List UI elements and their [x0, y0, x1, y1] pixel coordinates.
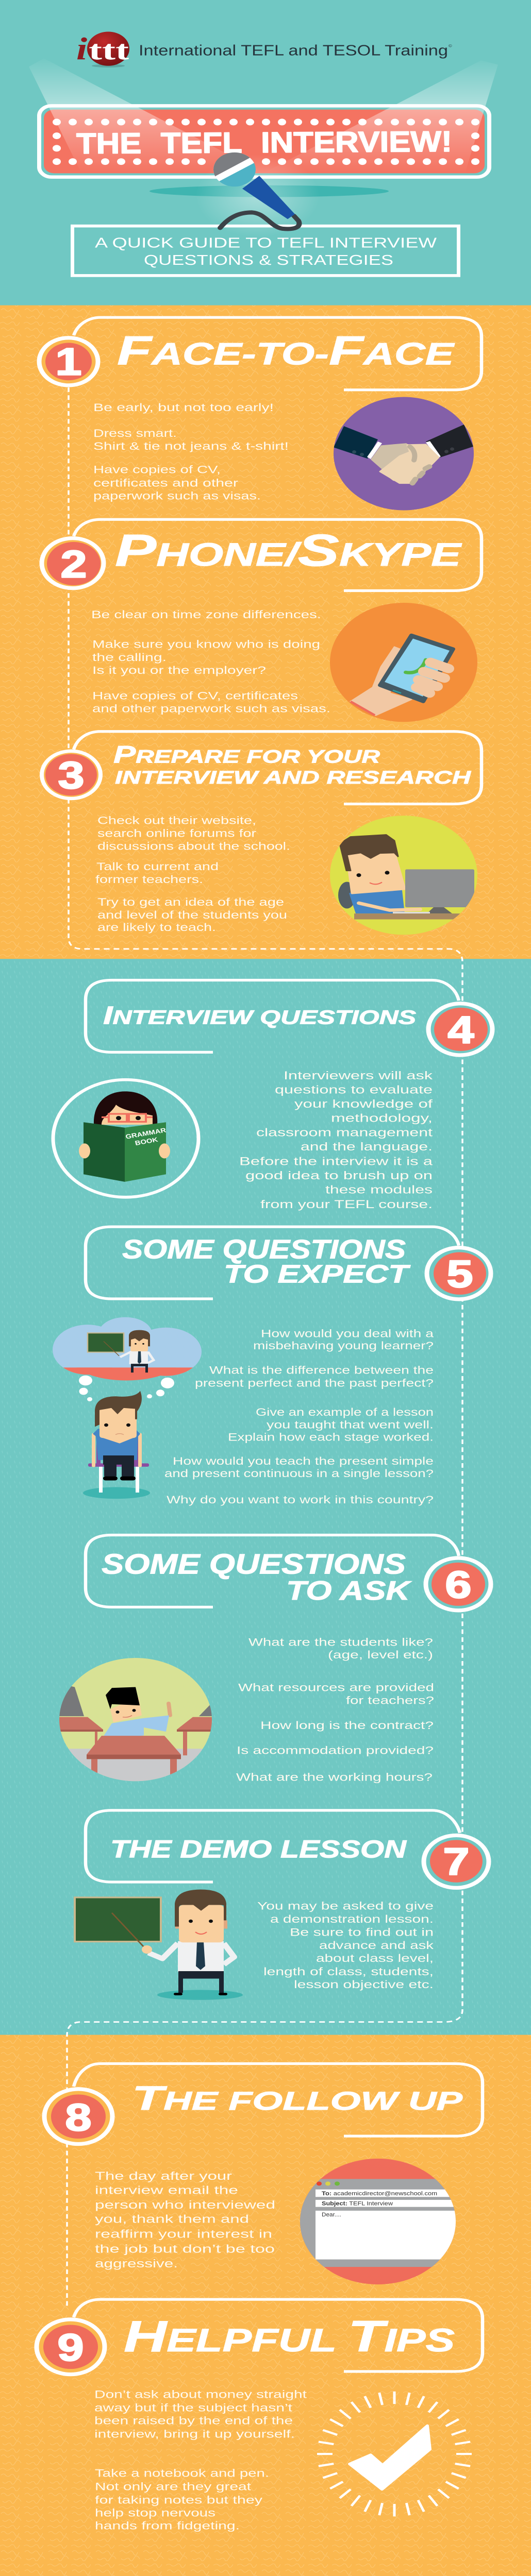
number badge 1 — [39, 338, 98, 385]
text block 3: and level of the students you — [97, 909, 287, 921]
text block 2: Have copies of CV, certificates — [92, 690, 298, 702]
text block 7: about class level, — [316, 1953, 434, 1965]
text block 3: search online forums for — [97, 828, 256, 840]
number badge 3: 3 — [58, 753, 85, 796]
logo — [76, 31, 452, 67]
text block 1: paperwork such as visas. — [93, 490, 261, 502]
text block 5: you taught that went well. — [267, 1419, 434, 1431]
heading: Some questions to ask: SOME QUESTIONS — [102, 1549, 406, 1580]
text block 5: Why do you want to work in this country? — [167, 1494, 434, 1506]
text block 3: Try to get an idea of the age — [97, 896, 284, 908]
text block 9: interview, bring it up yourself. — [94, 2429, 295, 2441]
panel: some questions to ask — [57, 1535, 491, 1786]
text block 9: Take a notebook and pen. — [95, 2468, 269, 2480]
text block 7: advance and ask — [319, 1940, 434, 1952]
text block 4: these modules — [325, 1183, 433, 1196]
text block 2: the calling. — [92, 652, 167, 664]
logo: i — [76, 31, 87, 66]
number badge 9 — [37, 2319, 105, 2375]
text block 4: your knowledge of — [294, 1097, 433, 1110]
panel: face-to-face — [39, 317, 482, 510]
text block 1 — [93, 402, 289, 502]
text block 6: (age, level etc.) — [328, 1649, 433, 1661]
number badge 2 — [42, 538, 104, 588]
heading: The follow up: THE FOLLOW UP — [132, 2079, 463, 2117]
heading: Some questions to ask — [102, 1549, 412, 1605]
icon: teacher at blackboard — [75, 1890, 243, 2000]
text block 3: discussions about the school. — [97, 841, 290, 853]
icon: thought bubbles — [79, 1376, 174, 1401]
text block 4: questions to evaluate — [275, 1083, 433, 1096]
text block 7: lesson objective etc. — [294, 1979, 434, 1991]
text block 8: you, thank them and — [95, 2213, 249, 2226]
heading: Prepare for your interview and research — [113, 741, 471, 788]
text block 4: methodology, — [331, 1112, 433, 1125]
icon: phone in hand — [330, 603, 477, 722]
heading: Some questions to expect: TO EXPECT — [224, 1260, 411, 1288]
title banner: THE TEFL INTERVIEW! — [76, 125, 452, 160]
icon: email window: Dear.... — [322, 2211, 341, 2218]
text block 8 — [95, 2170, 275, 2270]
text block 5 — [164, 1328, 434, 1506]
text block 1: Be early, but not too early! — [93, 402, 274, 414]
text block 3: Talk to current and — [96, 861, 219, 873]
heading: Interview questions: INTERVIEW QUESTIONS — [103, 1001, 417, 1029]
text block 5: present perfect and the past perfect? — [195, 1378, 434, 1389]
number badge 5 — [427, 1248, 491, 1299]
text block 9: for taking notes but they — [95, 2495, 262, 2506]
heading frame 5 — [86, 1227, 459, 1299]
icon: handshake — [334, 397, 474, 510]
heading frame 1 — [74, 317, 482, 390]
section background: teal middle — [0, 959, 531, 2035]
text block 6: Is accommodation provided? — [237, 1745, 434, 1757]
text block 2: Make sure you know who is doing — [92, 638, 320, 651]
heading frame 9 — [74, 2299, 483, 2371]
text block 9: help stop nervous — [95, 2507, 215, 2519]
text block 7: a demonstration lesson. — [270, 1913, 434, 1926]
text block 2: and other paperwork such as visas. — [92, 703, 330, 715]
heading: Some questions to expect: SOME QUESTIONS — [122, 1234, 406, 1264]
section background: orange top — [0, 306, 531, 959]
panel: the follow up — [44, 2063, 483, 2284]
icon: email window: To: academicdirector@newschool.com — [322, 2190, 437, 2197]
text block 4: classroom management — [256, 1126, 433, 1139]
panel: interview questions — [53, 980, 492, 1211]
text block 4: from your TEFL course. — [260, 1198, 433, 1211]
text block 2 — [91, 609, 330, 715]
icon: girl with grammar book: GRAMMAR — [125, 1127, 167, 1140]
subtitle box — [72, 226, 459, 276]
text block 8: the job but don’t be too — [95, 2243, 275, 2256]
icon: girl with grammar book — [53, 1080, 198, 1197]
text block 5: What is the difference between the — [209, 1365, 434, 1377]
text block 5: Give an example of a lesson — [256, 1406, 434, 1419]
number badge 8: 8 — [65, 2096, 92, 2139]
text block 9: hands from fidgeting. — [95, 2520, 240, 2532]
text block 6: What are the working hours? — [236, 1772, 433, 1784]
subtitle box: A QUICK GUIDE TO TEFL INTERVIEW — [95, 234, 437, 250]
title banner — [39, 106, 489, 177]
text block 4: and the language. — [301, 1141, 433, 1154]
text block 9 — [94, 2389, 307, 2532]
number badge 9: 9 — [57, 2326, 84, 2369]
icon: check mark with rays — [317, 2392, 472, 2516]
spotlight beams — [29, 58, 498, 173]
icon: classroom — [57, 1658, 217, 1786]
number badge 7 — [424, 1835, 489, 1888]
text block 3 — [95, 815, 290, 934]
panel: phone/skype — [42, 519, 482, 722]
heading frame 3 — [74, 732, 482, 804]
text block 5: misbehaving young learner? — [253, 1340, 434, 1352]
text block 2: Be clear on time zone differences. — [91, 609, 321, 621]
icon: man at computer — [330, 816, 477, 935]
subtitle box: QUESTIONS & STRATEGIES — [144, 252, 393, 268]
icon: email window — [300, 2159, 460, 2284]
banner light dots — [53, 118, 479, 165]
text block 8: person who interviewed — [95, 2198, 275, 2211]
text block 5: Explain how each stage worked. — [228, 1432, 434, 1444]
panel: the demo lesson — [75, 1810, 489, 2000]
number badge 4 — [428, 1004, 492, 1055]
text block 7: You may be asked to give — [257, 1901, 434, 1912]
heading frame 6 — [86, 1535, 459, 1607]
heading: Some questions to ask: TO ASK — [286, 1576, 412, 1605]
panel: some questions to expect — [53, 1227, 491, 1506]
number badge 2: 2 — [60, 543, 87, 586]
text block 8: aggressive. — [95, 2257, 178, 2270]
heading frame 2 — [74, 519, 482, 591]
heading: Prepare for your interview and research: INTERVIEW AND RESEARCH — [115, 768, 471, 788]
text block 7 — [257, 1901, 434, 1991]
number badge 6: 6 — [445, 1563, 472, 1606]
text block 6: How long is the contract? — [260, 1720, 434, 1732]
text block 1: certificates and other — [93, 478, 238, 489]
icon: email window: Subject: TEFL Interview — [322, 2200, 393, 2207]
text block 4: Interviewers will ask — [284, 1069, 433, 1082]
text block 1: Dress smart. — [93, 428, 177, 439]
icon: thought cloud with teacher — [53, 1317, 202, 1380]
text block 8: interview email the — [95, 2184, 238, 2197]
number badge 5: 5 — [446, 1252, 473, 1295]
number badge 7: 7 — [443, 1840, 470, 1883]
heading: Prepare for your interview and research: PREPARE FOR YOUR — [113, 741, 380, 768]
panel: helpful tips — [37, 2299, 483, 2532]
heading: The demo lesson: THE DEMO LESSON — [110, 1835, 407, 1863]
text block 6: for teachers? — [346, 1695, 434, 1707]
heading: Helpful tips: HELPFUL TIPS — [124, 2312, 455, 2361]
heading frame 7 — [86, 1810, 460, 1882]
text block 4: Before the interview it is a — [239, 1155, 433, 1168]
text block 9: away but if the subject hasn’t — [94, 2402, 293, 2414]
text block 8: reaffirm your interest in — [95, 2228, 272, 2241]
text block 6 — [236, 1637, 434, 1784]
number badge 6 — [426, 1558, 491, 1611]
number badge 3 — [42, 751, 101, 799]
text block 6: What resources are provided — [238, 1682, 434, 1694]
text block 2: Is it you or the employer? — [92, 665, 266, 677]
stage shadow — [150, 185, 389, 197]
text block 3: former teachers. — [95, 874, 203, 886]
text block 4: good idea to brush up on — [245, 1169, 433, 1182]
number badge 8 — [44, 2089, 112, 2144]
heading: Phone/Skype: PHONE/ SKYPE — [115, 525, 462, 575]
logo: International TEFL and TESOL Training — [139, 42, 448, 59]
connector: dashed timeline — [67, 387, 462, 2308]
icon: girl with grammar book: BOOK — [134, 1136, 159, 1147]
text block 6: What are the students like? — [248, 1637, 433, 1649]
text block 9: Not only are they great — [95, 2481, 252, 2493]
logo: ttt — [89, 35, 129, 65]
text block 5: and present continuous in a single lesson? — [164, 1468, 434, 1480]
panel: prepare and research — [42, 732, 482, 935]
icon: seated man — [83, 1391, 150, 1499]
heading frame 8 — [74, 2063, 483, 2136]
logo: © — [449, 44, 452, 48]
text block 1: Shirt & tie not jeans & t-shirt! — [93, 440, 289, 453]
section background: orange bottom — [0, 2035, 531, 2576]
heading: Face-to-Face: FACE-TO- FACE — [117, 327, 455, 373]
text block 1: Have copies of CV, — [93, 464, 221, 476]
text block 9: Don’t ask about money straight — [94, 2389, 307, 2401]
text block 7: length of class, students, — [263, 1966, 434, 1978]
text block 8: The day after your — [95, 2170, 233, 2182]
heading frame 4 — [86, 980, 459, 1052]
text block 7: Be sure to find out in — [290, 1926, 434, 1939]
text block 5: How would you teach the present simple — [173, 1455, 434, 1467]
icon: microphone — [203, 152, 312, 231]
text block 5: How would you deal with a — [261, 1328, 434, 1340]
heading: Some questions to expect — [122, 1234, 411, 1288]
section background: header — [0, 0, 531, 306]
number badge 1: 1 — [55, 340, 82, 383]
text block 4 — [239, 1069, 433, 1211]
text block 3: are likely to teach. — [97, 922, 216, 934]
number badge 4: 4 — [447, 1008, 474, 1052]
text block 3: Check out their website, — [97, 815, 256, 827]
text block 9: been raised by the end of the — [94, 2415, 293, 2427]
